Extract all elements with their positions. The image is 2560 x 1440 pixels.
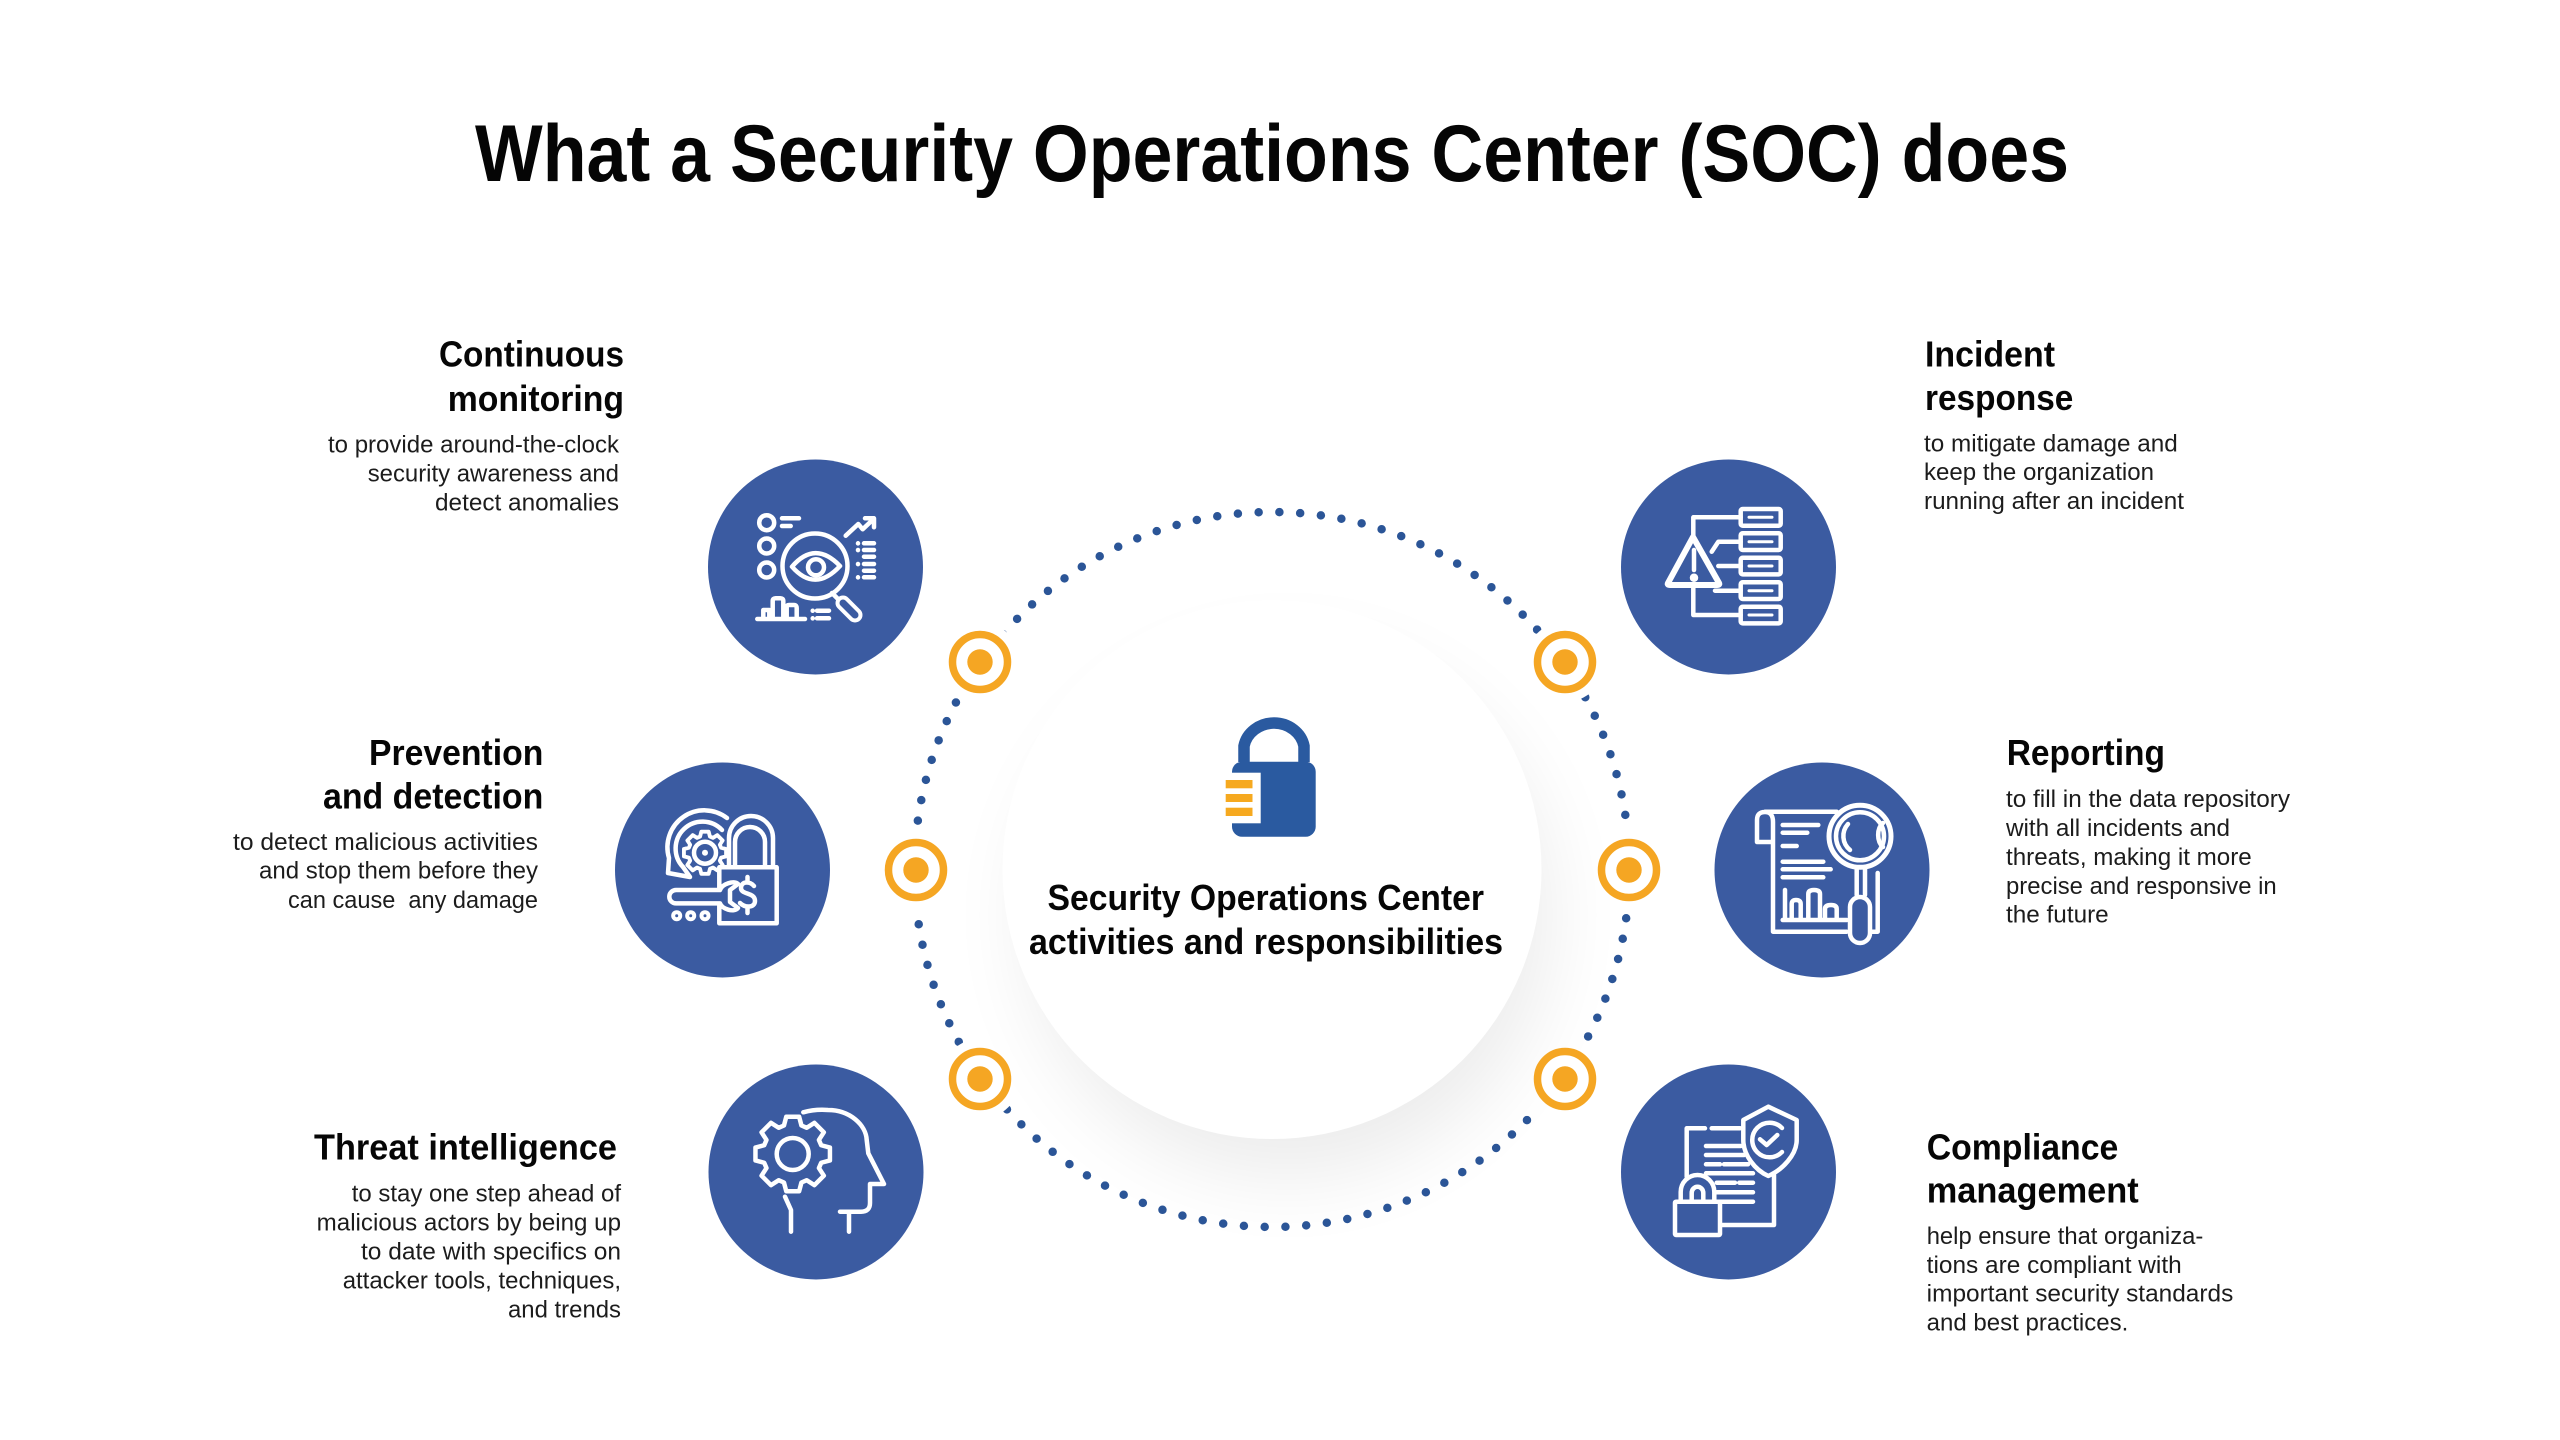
- heading and text: incident response: keep the organization: [1924, 459, 2154, 486]
- heading and text: compliance management: [1927, 1126, 2233, 1337]
- heading and text: threat intelligence: to date with specifics on: [361, 1238, 621, 1265]
- heading and text: compliance management: help ensure that organiza-: [1927, 1223, 2203, 1250]
- dotted ring: [914, 512, 1630, 1227]
- heading and text: continuous monitoring: security awareness and: [368, 460, 619, 487]
- central white circle with soft shadow: [1002, 600, 1550, 1177]
- heading and text: reporting: [2005, 732, 2290, 929]
- heading and text: prevention and detection: to detect malicious activities: [233, 829, 538, 856]
- heading and text: prevention and detection: [233, 732, 543, 914]
- heading and text: continuous monitoring: detect anomalies: [435, 490, 619, 517]
- heading and text: reporting: the future: [2006, 902, 2109, 929]
- heading and text: threat intelligence: malicious actors by being up: [317, 1210, 621, 1237]
- heading and text: reporting: to fill in the data repository: [2006, 786, 2290, 813]
- heading and text: threat intelligence: and trends: [508, 1296, 621, 1323]
- heading and text: threat intelligence: [314, 1126, 621, 1323]
- heading and text: compliance management: tions are compliant with: [1927, 1252, 2182, 1279]
- orange ring markers: [888, 634, 1656, 1106]
- heading and text: prevention and detection: and detection: [323, 775, 543, 816]
- panel: continuous monitoring icon: [708, 460, 923, 674]
- heading and text: reporting: precise and responsive in: [2006, 873, 2277, 900]
- heading and text: prevention and detection: and stop them before they: [259, 858, 538, 885]
- heading and text: continuous monitoring: monitoring: [448, 378, 624, 419]
- heading and text: compliance management: important security standards: [1927, 1281, 2233, 1308]
- title: What a Security Operations Center (SOC) does: [475, 109, 2069, 199]
- panel: reporting icon: [1714, 762, 1930, 978]
- central caption: [1029, 877, 1503, 962]
- heading and text: reporting: with all incidents and: [2005, 815, 2230, 842]
- icon: central padlock: [1226, 723, 1316, 837]
- heading and text: incident response: response: [1925, 377, 2073, 418]
- heading and text: incident response: Incident: [1925, 334, 2055, 375]
- heading and text: prevention and detection: Prevention: [369, 732, 543, 773]
- heading and text: incident response: running after an incident: [1924, 488, 2184, 515]
- heading and text: continuous monitoring: Continuous: [439, 334, 624, 375]
- central caption: Security Operations Center: [1048, 877, 1484, 918]
- heading and text: threat intelligence: attacker tools, techniques,: [343, 1267, 621, 1294]
- heading and text: prevention and detection: can cause any damage: [288, 887, 538, 914]
- heading and text: continuous monitoring: to provide around-the-clock: [328, 432, 620, 458]
- heading and text: incident response: to mitigate damage and: [1924, 430, 2178, 457]
- panel: prevention and detection icon: [615, 762, 830, 978]
- heading and text: compliance management: management: [1927, 1170, 2139, 1211]
- central caption: activities and responsibilities: [1029, 921, 1503, 962]
- heading and text: continuous monitoring: [328, 334, 624, 517]
- heading and text: threat intelligence: to stay one step ahead of: [352, 1181, 621, 1208]
- heading and text: incident response: [1924, 334, 2184, 515]
- panel: incident response icon: [1621, 460, 1836, 674]
- panel: threat intelligence icon: [708, 1064, 924, 1280]
- panel: compliance management icon: [1621, 1064, 1836, 1280]
- heading and text: reporting: Reporting: [2007, 732, 2165, 773]
- heading and text: compliance management: Compliance: [1927, 1126, 2118, 1167]
- heading and text: compliance management: and best practices.: [1927, 1310, 2128, 1337]
- heading and text: threat intelligence: Threat intelligence: [314, 1126, 617, 1167]
- heading and text: reporting: threats, making it more: [2006, 844, 2252, 871]
